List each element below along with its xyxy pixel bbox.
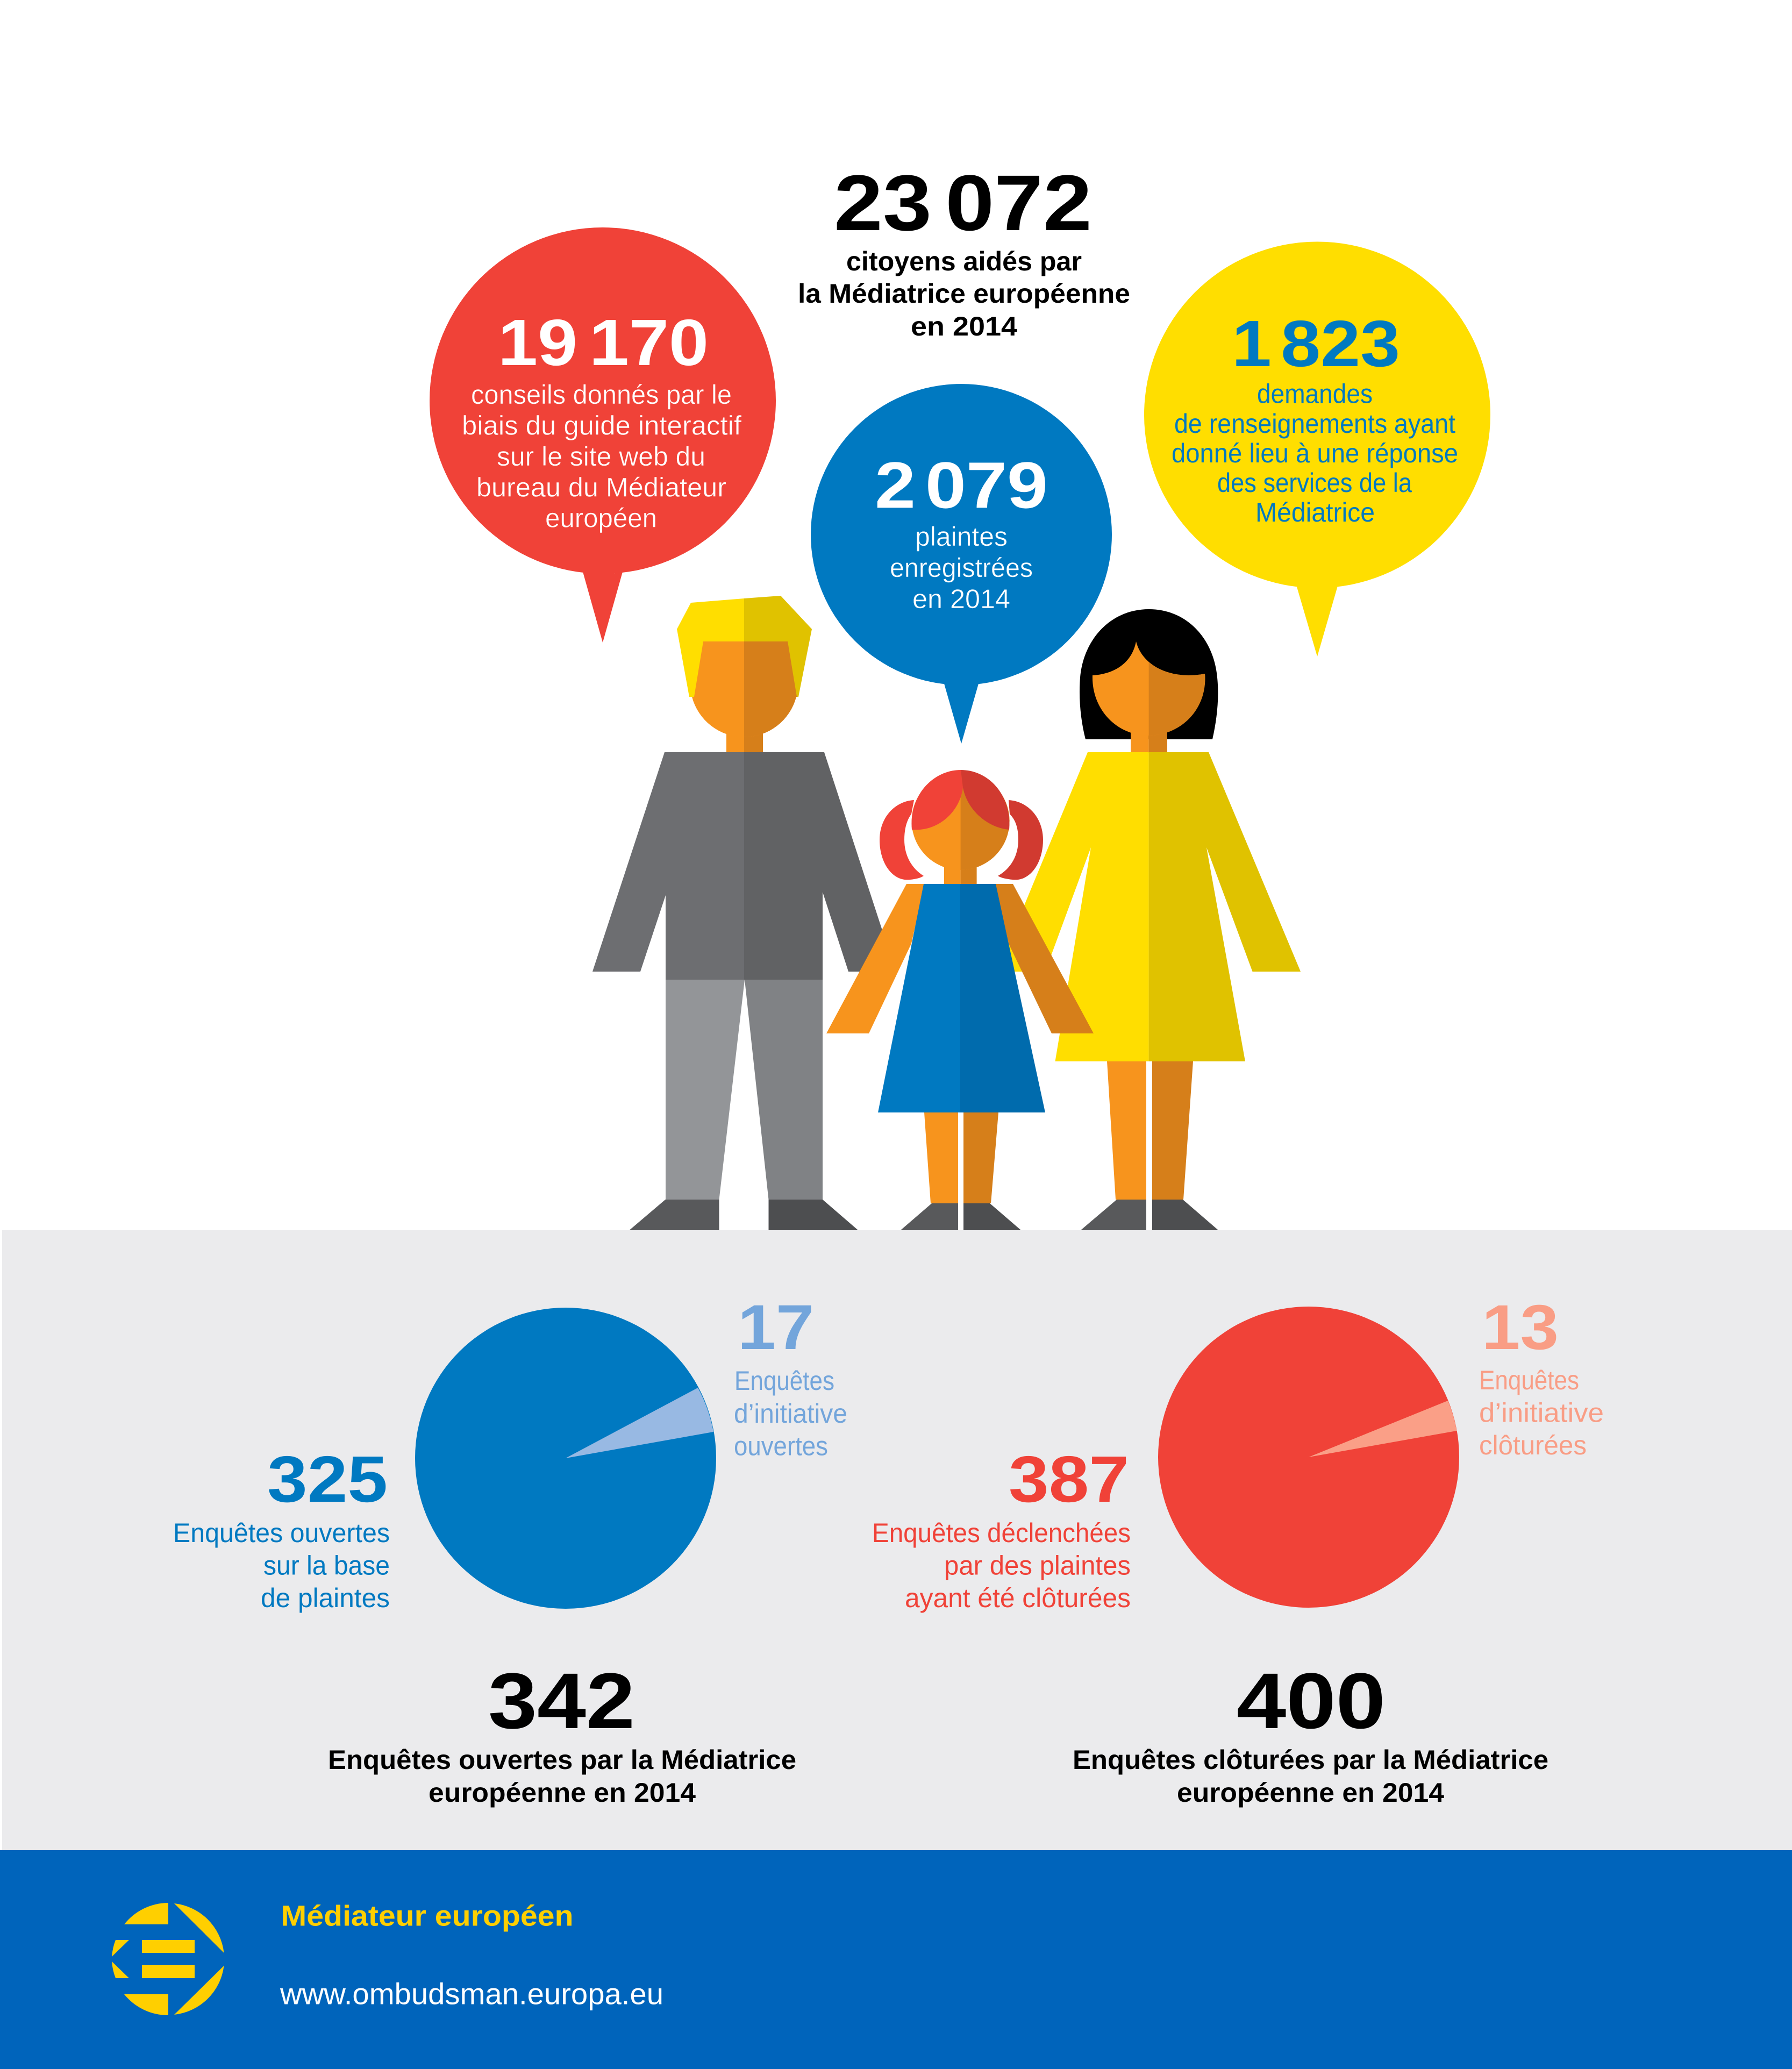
caption for 17: Enquêtes (734, 1366, 834, 1396)
icon: European Ombudsman logo (112, 1903, 224, 2015)
man shoes (629, 1200, 858, 1230)
caption for 342: européenne en 2014 (429, 1778, 696, 1808)
yellow bubble caption: Médiatrice (1255, 497, 1375, 527)
pie chart: inquiries closed (1158, 1307, 1459, 1608)
total: 342 inquiries opened (328, 1657, 796, 1808)
yellow bubble caption: des services de la (1217, 468, 1412, 498)
yellow bubble caption: de renseignements ayant (1174, 409, 1455, 439)
headline caption (798, 246, 1130, 341)
footer organisation name: Médiateur européen (281, 1900, 573, 1932)
speech bubble: red, interactive guide advice (430, 227, 776, 643)
caption for 400: Enquêtes clôturées par la Médiatrice (1073, 1745, 1548, 1775)
girl dress (878, 884, 1045, 1112)
caption for 387: par des plaintes (944, 1551, 1131, 1581)
man face (692, 641, 797, 737)
red bubble caption: conseils donnés par le (471, 380, 732, 410)
caption for 17 (734, 1366, 847, 1461)
number 387: 387 (1009, 1443, 1129, 1516)
caption for 325: sur la base (263, 1551, 390, 1581)
label: 13 own-initiative inquiries closed (1479, 1292, 1604, 1460)
speech bubble: blue, registered complaints (811, 384, 1112, 744)
own-initiative slice (566, 1388, 713, 1458)
label: 387 complaint-based inquiries closed (872, 1443, 1131, 1613)
caption for 325: de plaintes (261, 1583, 390, 1613)
number 23 072: 23 072 (834, 159, 1092, 247)
caption for 400: européenne en 2014 (1177, 1778, 1444, 1808)
red bubble caption: biais du guide interactif (462, 411, 741, 441)
red bubble caption: bureau du Médiateur (476, 472, 726, 502)
headline caption: la Médiatrice européenne (798, 279, 1130, 309)
girl pigtails (880, 800, 1043, 880)
yellow bubble caption: donné lieu à une réponse (1172, 438, 1458, 468)
label: 325 complaint-based inquiries (173, 1443, 390, 1613)
caption for 13: Enquêtes (1479, 1365, 1579, 1395)
number 13: 13 (1482, 1292, 1559, 1363)
woman face (1093, 641, 1205, 736)
red bubble caption: européen (545, 503, 657, 533)
number 342: 342 (488, 1657, 635, 1745)
number 19 170: 19 170 (498, 306, 709, 379)
caption for 387: Enquêtes déclenchées (872, 1518, 1131, 1548)
blue pie (415, 1308, 716, 1609)
caption for 13: clôturées (1479, 1430, 1587, 1460)
number 2 079: 2 079 (875, 448, 1048, 522)
caption for 400 (1073, 1745, 1548, 1808)
woman shoes (1081, 1200, 1218, 1230)
girl arms (826, 884, 1094, 1033)
yellow bubble caption: demandes (1257, 379, 1373, 409)
speech bubble: yellow, information requests (1144, 242, 1490, 657)
man trousers (666, 980, 823, 1200)
woman dress (997, 752, 1301, 1061)
man shirt (592, 752, 896, 980)
yellow bubble caption (1172, 379, 1458, 527)
caption for 387 (872, 1518, 1131, 1613)
woman figure (997, 609, 1301, 1230)
red bubble caption: sur le site web du (497, 441, 705, 472)
woman neck (1131, 726, 1167, 753)
number 325: 325 (267, 1443, 388, 1516)
yellow bubble shape (1144, 242, 1490, 657)
own-initiative slice (1309, 1401, 1457, 1457)
grey lower panel (2, 1230, 1792, 1850)
total: 400 inquiries closed (1073, 1657, 1548, 1808)
caption for 17: ouvertes (734, 1431, 828, 1461)
blue bubble caption: plaintes (915, 522, 1008, 552)
caption for 325: Enquêtes ouvertes (173, 1518, 390, 1548)
man hair (677, 596, 812, 697)
number 400: 400 (1237, 1657, 1386, 1745)
girl shoes (901, 1203, 1021, 1230)
headline caption: citoyens aidés par (846, 246, 1082, 276)
red pie (1158, 1307, 1459, 1608)
number 1 823: 1 823 (1232, 307, 1400, 380)
girl neck (944, 860, 977, 884)
caption for 13: d’initiative (1479, 1398, 1604, 1428)
blue bubble caption (890, 522, 1033, 614)
caption for 387: ayant été clôturées (905, 1583, 1131, 1613)
man neck (726, 726, 763, 753)
girl legs (924, 1112, 998, 1203)
pie chart: inquiries opened (415, 1308, 716, 1609)
girl face (912, 772, 1010, 870)
headline statistic: citizens helped (798, 159, 1130, 341)
blue bubble caption: en 2014 (912, 584, 1010, 614)
footer website address: www.ombudsman.europa.eu (280, 1977, 663, 2011)
blue bubble caption: enregistrées (890, 553, 1033, 583)
girl figure (826, 770, 1094, 1230)
footer band (0, 1850, 1792, 2069)
caption for 13 (1479, 1365, 1604, 1460)
caption for 342: Enquêtes ouvertes par la Médiatrice (328, 1745, 796, 1775)
number 17: 17 (738, 1292, 814, 1363)
red bubble caption (462, 380, 741, 533)
red bubble shape (430, 227, 776, 643)
caption for 342 (328, 1745, 796, 1808)
headline caption: en 2014 (911, 311, 1017, 341)
girl hair (911, 770, 1009, 830)
label: 17 own-initiative inquiries (734, 1292, 847, 1461)
woman hair (1080, 609, 1218, 739)
woman legs (1107, 1061, 1193, 1200)
man figure (592, 596, 896, 1230)
caption for 17: d’initiative (734, 1399, 847, 1429)
blue bubble shape (811, 384, 1112, 744)
caption for 325 (173, 1518, 390, 1613)
